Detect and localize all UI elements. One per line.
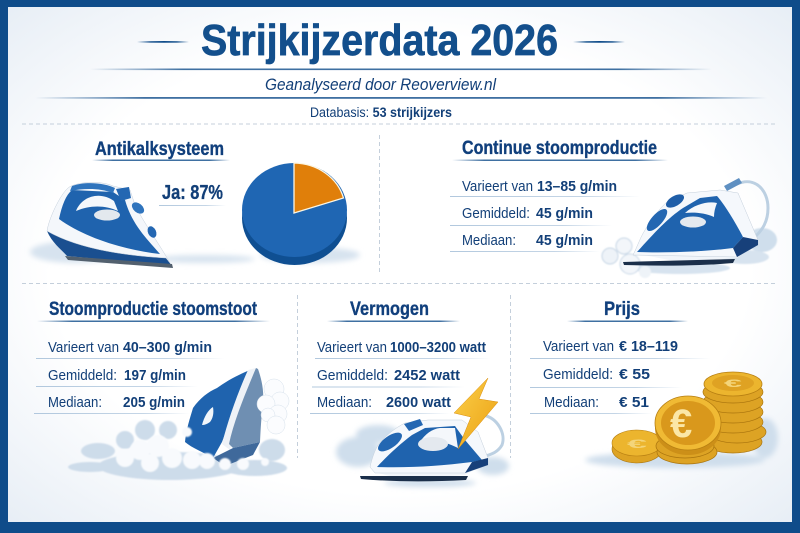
heading: Antikalksysteem (95, 139, 224, 160)
panel: Vermogen (310, 299, 509, 487)
row: gemiddeld: Gemiddeld: (48, 368, 117, 384)
heading: Continue stoomproductie (462, 138, 657, 159)
heading: Prijs (604, 299, 640, 320)
row: gemiddeld (48, 368, 186, 384)
row: mediaan (462, 233, 593, 249)
row: varieert: 40–300 g/min (123, 340, 212, 356)
panel: Stoomproductie stoomstoot (34, 299, 289, 480)
value: Ja: 87% (162, 182, 223, 204)
row: gemiddeld (543, 367, 650, 383)
row: varieert: Varieert van (48, 340, 119, 356)
row: mediaan (48, 395, 185, 411)
row: gemiddeld (317, 368, 460, 384)
row: gemiddeld (462, 206, 593, 222)
row: gemiddeld: 197 g/min (124, 368, 186, 384)
heading: Stoomproductie stoomstoot (49, 299, 258, 320)
row: varieert (543, 339, 678, 355)
row: varieert (48, 340, 212, 356)
coin left (612, 430, 662, 463)
row: mediaan: € 51 (619, 395, 649, 411)
coin left: € (627, 437, 648, 451)
icon: iron (47, 182, 173, 268)
row: varieert: Varieert van (317, 340, 387, 356)
row: mediaan (317, 395, 451, 411)
coin shadow (585, 418, 778, 468)
row: gemiddeld: 45 g/min (536, 206, 593, 222)
row: mediaan: Mediaan: (48, 395, 102, 411)
title ornament right (573, 41, 625, 43)
row: mediaan (544, 395, 649, 411)
row: gemiddeld: € 55 (619, 367, 650, 383)
row: gemiddeld: Gemiddeld: (317, 368, 388, 384)
row: mediaan: 45 g/min (536, 233, 593, 249)
row: gemiddeld: 2452 watt (394, 368, 460, 384)
panel: Continue stoomproductie (450, 138, 777, 278)
row: mediaan: Mediaan: (317, 395, 372, 411)
icon: upright iron (185, 368, 263, 466)
icon: lightning bolt (454, 378, 498, 449)
row: mediaan: Mediaan: (462, 233, 516, 249)
icon: coin stack: € (724, 378, 742, 390)
panel: Prijs (530, 299, 778, 468)
row: varieert: Varieert van (543, 339, 614, 355)
row: gemiddeld: Gemiddeld: (543, 367, 613, 383)
pie chart: 87% ja (242, 163, 347, 265)
database count: Databasis: 53 strijkijzers (310, 105, 452, 120)
panel: Antikalksysteem (30, 139, 360, 268)
title ornament left (137, 41, 189, 43)
row: mediaan: 205 g/min (123, 395, 185, 411)
steam clouds (602, 228, 777, 278)
row: varieert (317, 340, 486, 356)
heading: Vermogen (350, 299, 429, 320)
coin large: € (670, 402, 692, 446)
row: varieert (462, 179, 617, 195)
icon: iron with cord (623, 178, 768, 266)
row: varieert: Varieert van (462, 179, 533, 195)
cloud shadow (336, 425, 509, 487)
row: varieert: 13–85 g/min (537, 179, 617, 195)
row: varieert: € 18–119 (619, 339, 678, 355)
steam cloud front (116, 427, 269, 472)
row: mediaan: 2600 watt (386, 395, 451, 411)
title: Strijkijzerdata 2026 (201, 16, 558, 65)
steam cloud back (68, 420, 287, 480)
icon: coin stack (612, 372, 766, 464)
steam cloud right (257, 379, 289, 434)
header (137, 16, 625, 120)
cloud shadow (30, 241, 360, 263)
subtitle: Geanalyseerd door Reoverview.nl (265, 75, 497, 94)
coin large (655, 396, 721, 455)
icon: iron (360, 415, 503, 481)
row: gemiddeld: Gemiddeld: (462, 206, 530, 222)
row: mediaan: Mediaan: (544, 395, 599, 411)
row: varieert: 1000–3200 watt (390, 340, 486, 356)
